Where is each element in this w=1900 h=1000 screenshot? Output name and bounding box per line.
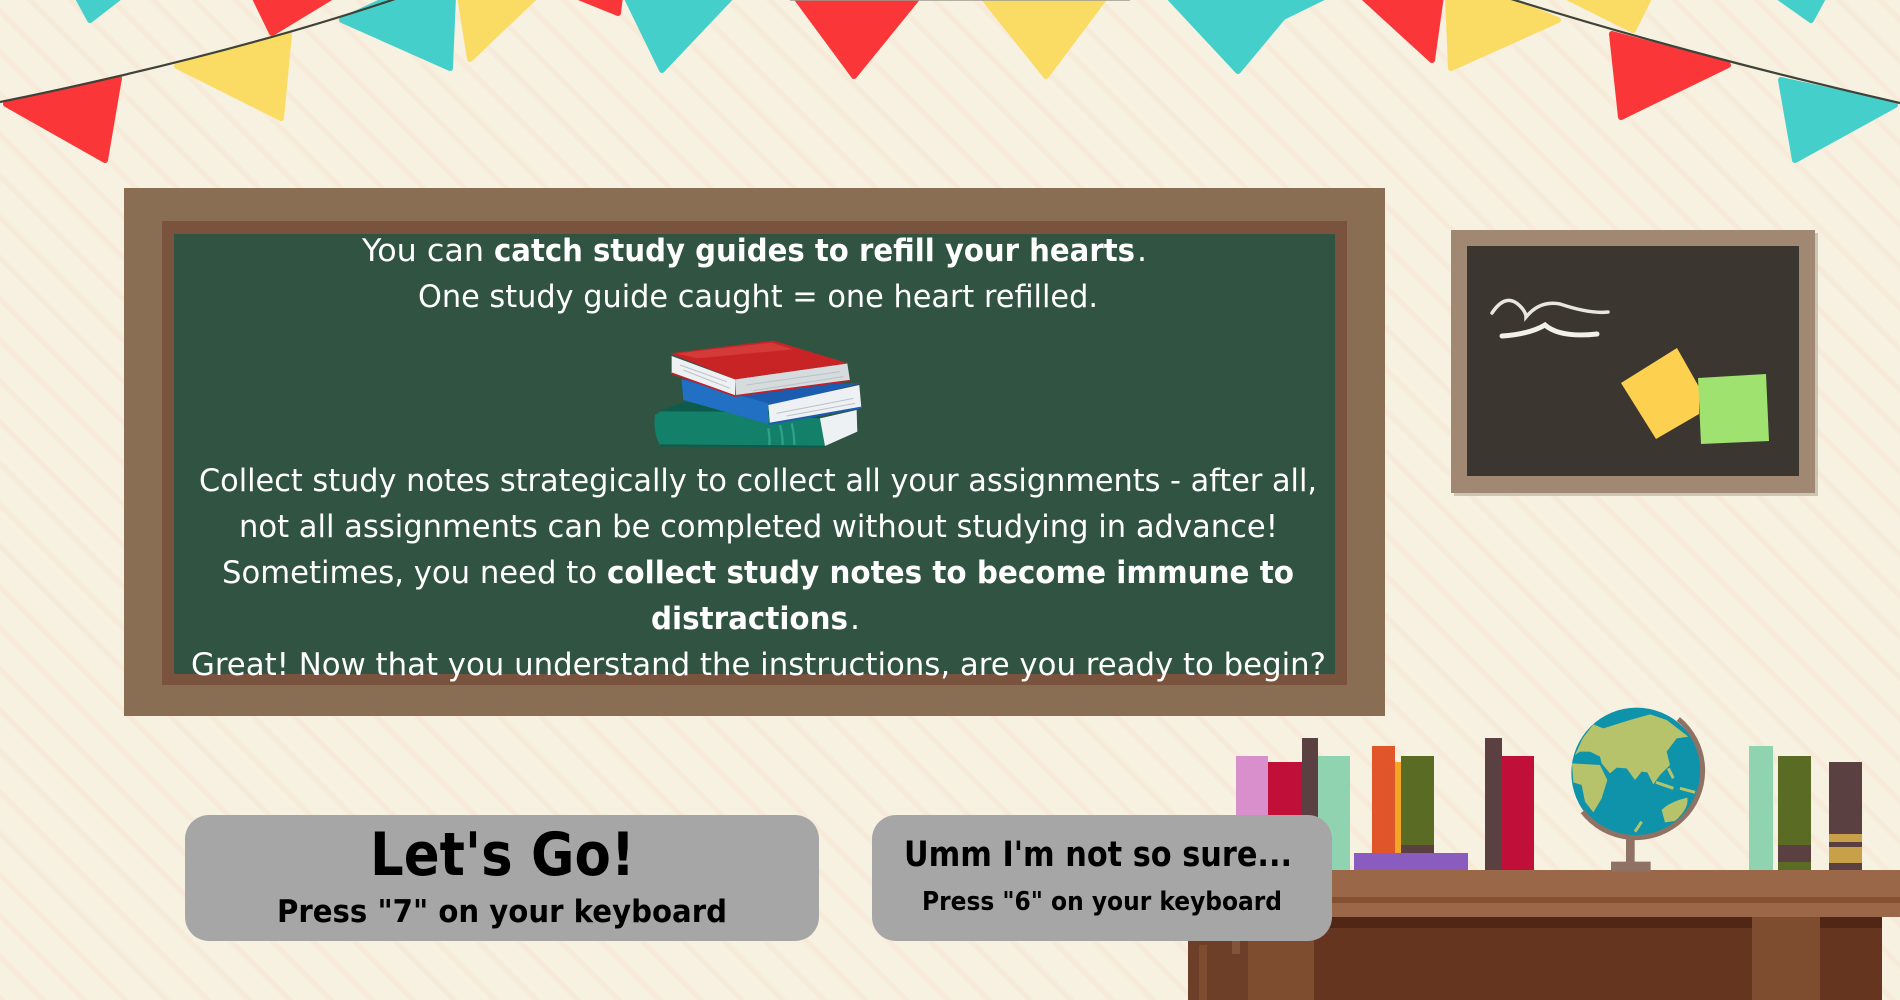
instruction text on chalkboard xyxy=(191,233,1326,683)
instruction text on chalkboard: distractions xyxy=(651,601,848,637)
button: Let's Go xyxy=(185,815,819,941)
instruction text on chalkboard: . xyxy=(850,601,860,637)
instruction text on chalkboard: not all assignments can be completed without studying in advance! xyxy=(239,509,1278,545)
large green chalkboard xyxy=(124,188,1385,716)
icon: globe xyxy=(1571,708,1703,872)
row of books on desk xyxy=(1236,738,1862,870)
button: Let's Go: Press "7" on your keyboard xyxy=(277,894,727,930)
bunting flags across the top xyxy=(6,0,1895,160)
bunting strings xyxy=(0,0,1900,103)
small blackboard with sticky notes xyxy=(1451,230,1818,496)
desk xyxy=(1170,870,1900,1000)
instruction text on chalkboard: Sometimes, you need to xyxy=(222,555,597,591)
instruction text on chalkboard: collect study notes to become immune to xyxy=(607,555,1294,591)
instruction text on chalkboard: You can xyxy=(361,233,484,269)
button: Let's Go: Let's Go! xyxy=(370,820,635,890)
instruction text on chalkboard: Collect study notes strategically to collect all your assignments - after all, xyxy=(199,463,1317,499)
button: not so sure: Press "6" on your keyboard xyxy=(922,887,1282,917)
button: not so sure: Umm I'm not so sure... xyxy=(904,835,1292,875)
instruction text on chalkboard: One study guide caught = one heart refilled. xyxy=(418,279,1098,315)
instruction text on chalkboard: catch study guides to refill your hearts xyxy=(494,233,1135,269)
instruction text on chalkboard: . xyxy=(1137,233,1147,269)
instruction text on chalkboard: Great! Now that you understand the instructions, are you ready to begin? xyxy=(191,647,1326,683)
icon: stack of books xyxy=(654,341,861,447)
button: not so sure xyxy=(872,815,1332,941)
